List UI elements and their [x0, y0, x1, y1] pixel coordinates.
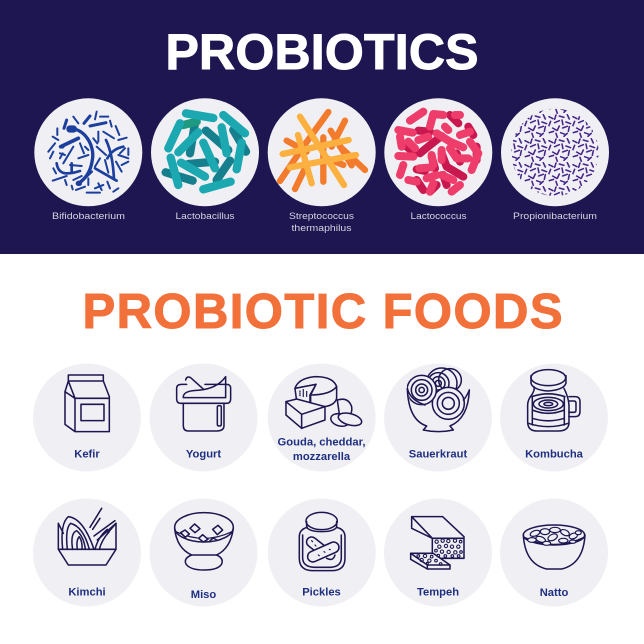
food: Miso — [150, 498, 258, 606]
label: mozzarella — [293, 451, 351, 463]
bacterium: Bifidobacterium — [34, 98, 142, 222]
food: Sauerkraut — [384, 364, 492, 472]
icon: yogurt cup — [177, 377, 231, 431]
food: Kombucha — [500, 364, 608, 472]
label: Tempeh — [417, 586, 459, 598]
label: thermaphilus — [292, 223, 352, 234]
panel: probiotics header — [0, 0, 644, 254]
icon: bowl of sauerkraut — [407, 368, 469, 432]
label: Kombucha — [525, 448, 584, 460]
label: Pickles — [302, 586, 341, 598]
icon: kombucha jar — [528, 370, 580, 431]
bacterium: Lactobacillus — [151, 98, 259, 222]
title: PROBIOTICS — [166, 24, 478, 80]
label: Kimchi — [68, 586, 106, 598]
label — [289, 211, 354, 234]
heading: probiotic foods: PROBIOTIC FOODS — [82, 285, 562, 339]
label: Miso — [191, 589, 216, 601]
icon: kimchi bowl — [58, 508, 116, 565]
icon: cheese — [286, 377, 363, 428]
food: Natto — [500, 498, 608, 606]
label: Propionibacterium — [513, 211, 597, 222]
bacterium: Propionibacterium — [501, 98, 609, 222]
label: Lactobacillus — [176, 211, 235, 222]
label: Sauerkraut — [409, 448, 467, 460]
food: Kefir — [33, 364, 141, 472]
food: Kimchi — [33, 498, 141, 606]
icon: kefir carton — [65, 375, 109, 432]
label: Gouda, cheddar, — [278, 436, 366, 448]
icon: pickle jar — [299, 512, 345, 571]
icon: miso soup — [175, 513, 233, 570]
label: Streptococcus — [289, 211, 354, 222]
label: Kefir — [74, 448, 100, 460]
icon: tempeh block — [411, 517, 464, 569]
label: Natto — [540, 587, 568, 599]
label — [278, 436, 366, 463]
label: Yogurt — [186, 448, 221, 460]
food: Gouda, cheddar, mozzarella — [268, 364, 376, 472]
bacterium: Streptococcus thermaphilus — [268, 98, 376, 234]
food: Tempeh — [384, 498, 492, 606]
bacterium: Lactococcus — [384, 98, 492, 222]
label: Lactococcus — [410, 211, 467, 222]
food: Yogurt — [150, 364, 258, 472]
label: Bifidobacterium — [52, 211, 125, 222]
icon: natto bowl — [523, 525, 585, 569]
food: Pickles — [268, 498, 376, 606]
